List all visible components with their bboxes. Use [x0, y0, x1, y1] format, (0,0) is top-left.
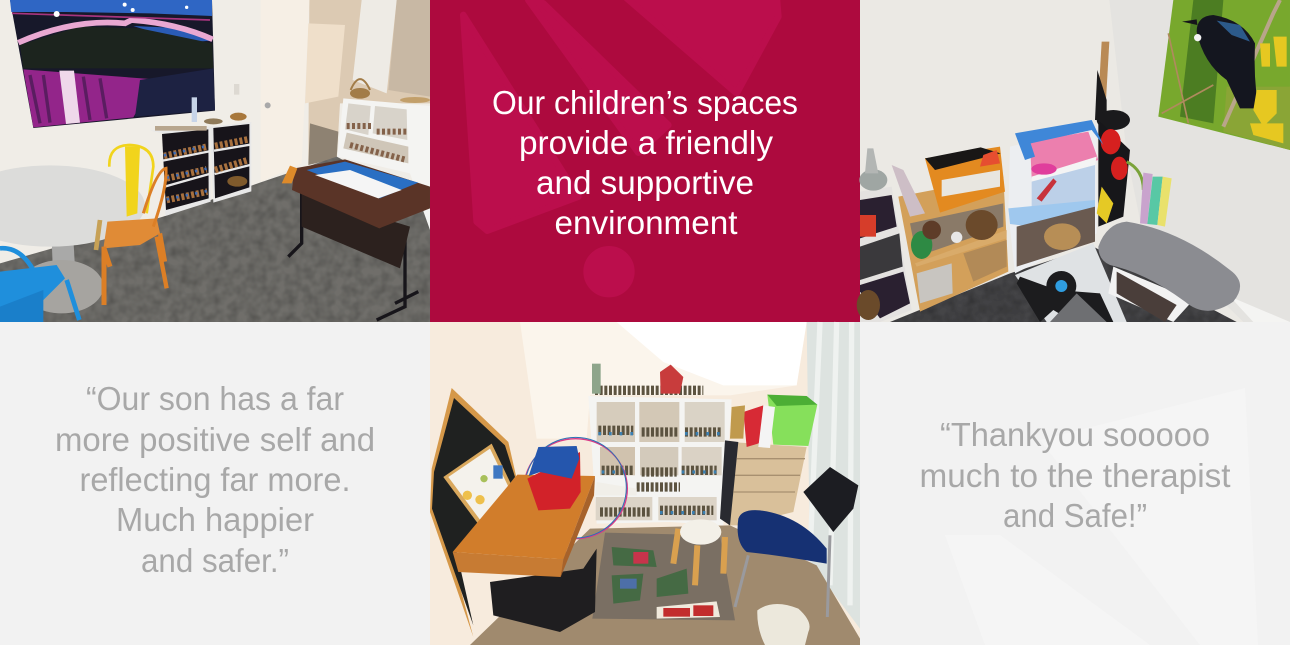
panel: corner with dollhouse and bird poster — [857, 0, 1290, 322]
background triangle shapes — [463, 0, 778, 294]
headline text: and supportive — [536, 164, 754, 201]
black shelf unit — [857, 148, 912, 322]
road play mat — [592, 533, 735, 620]
wooden shelf with tiger box — [892, 147, 1008, 312]
road play mat — [1015, 243, 1127, 322]
quote text: “Thankyou sooooo — [940, 416, 1210, 453]
headline text: Our children’s spaces — [492, 84, 798, 121]
headline text — [492, 84, 798, 241]
yellow chair — [96, 145, 153, 250]
white toy shelves — [337, 79, 430, 230]
orange desk with red box — [453, 446, 597, 632]
panel: testimonial about son — [0, 322, 430, 645]
wall poster of bridge at night — [10, 0, 215, 128]
white cube toy shelves — [588, 364, 732, 525]
orange chair — [103, 168, 167, 305]
blue chair — [0, 248, 79, 322]
panel: crimson headline tile — [430, 0, 860, 322]
faint background shapes — [945, 388, 1258, 645]
bird poster — [1158, 0, 1290, 150]
panel: testimonial about son: reflecting far more. — [80, 461, 350, 498]
toy bookcases — [150, 97, 251, 216]
headline text: environment — [554, 204, 738, 241]
quote text: and Safe!” — [1003, 497, 1147, 534]
door — [261, 0, 309, 182]
waste bin — [757, 604, 810, 645]
floor carpet — [0, 157, 430, 322]
drumsticks and hanging toys — [1095, 42, 1172, 227]
round white table — [0, 165, 145, 313]
hula hoops — [524, 437, 627, 539]
headline text: provide a friendly — [519, 124, 773, 161]
panel: testimonial about son: “Our son has a far — [86, 380, 344, 417]
bench with grey fur throw — [1098, 222, 1240, 322]
filing cabinet with green box — [720, 395, 817, 525]
carpet floor — [890, 247, 1237, 322]
panel: play corner with white toy shelves and orange desk — [430, 322, 860, 645]
sand tray on wheels — [282, 159, 430, 320]
dollhouse — [1008, 120, 1103, 273]
quote text — [920, 416, 1230, 534]
blue office chair — [735, 467, 858, 617]
panel: testimonial about son: and safer.” — [141, 542, 289, 579]
panel: testimonial thank you — [860, 322, 1290, 645]
wooden floor — [470, 525, 860, 645]
panel: testimonial about son: more positive self and — [55, 421, 375, 458]
quote text: much to the therapist — [920, 457, 1230, 494]
panel: testimonial about son: Much happier — [116, 501, 314, 538]
panel: playroom photo with round table and sand tray — [0, 0, 430, 322]
blackboard easel — [430, 388, 517, 637]
round stool — [673, 519, 725, 585]
